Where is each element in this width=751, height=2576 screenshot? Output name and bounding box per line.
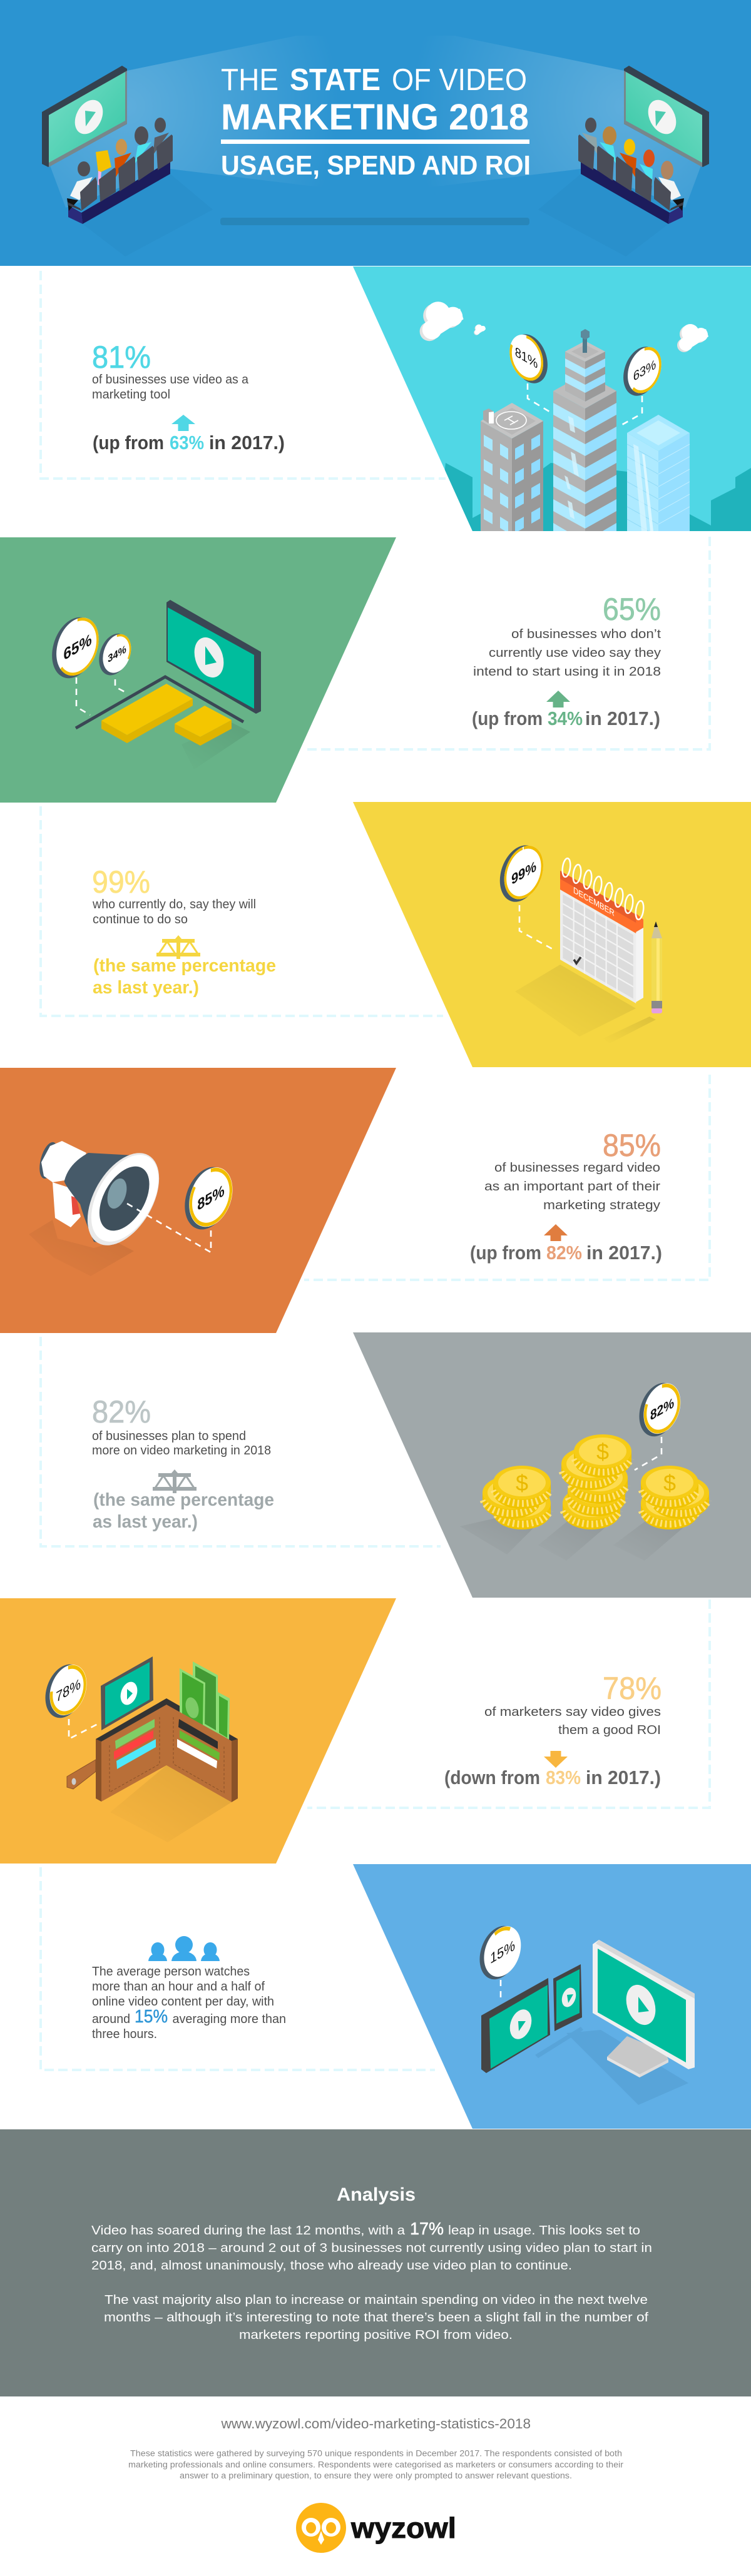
text block: 99%: continue to do so xyxy=(93,913,188,926)
icon: yellow bricks xyxy=(101,684,232,746)
icon: calendar: DECEMBER xyxy=(573,885,615,918)
building: helipad tower xyxy=(481,403,543,533)
heading: analysis: Analysis xyxy=(337,2184,416,2205)
connector: 81% badge xyxy=(528,383,549,412)
badge: 63%: 63% xyxy=(633,357,656,385)
icon: people xyxy=(148,1936,220,1961)
text block: watching stat: more than an hour and a half of xyxy=(92,1980,265,1994)
text block: down from 83%: (down from xyxy=(444,1767,540,1788)
connector: 78% badge xyxy=(69,1719,99,1739)
text block: 78%: 78% xyxy=(603,1671,662,1706)
text block: 82%: 82% xyxy=(92,1394,151,1429)
text block: same percentage xyxy=(93,956,276,998)
text block: up from 82%: in 2017.) xyxy=(586,1242,662,1264)
icon: monitor xyxy=(166,600,261,714)
title: THE xyxy=(221,63,278,97)
bills xyxy=(180,1661,230,1742)
text block: 65% xyxy=(473,592,661,679)
logo: wyzowl: wyzowl xyxy=(350,2512,456,2544)
text block: watching stat: 15% xyxy=(135,2007,168,2027)
icon: clouds xyxy=(420,302,708,352)
illustration: blue panel with devices xyxy=(353,1864,751,2129)
icon: phone xyxy=(553,1964,582,2031)
arrow: down xyxy=(544,1751,568,1768)
text block: watching stat: online video content per day, with xyxy=(92,1995,274,2009)
text block: 82% xyxy=(92,1394,271,1458)
panel: usage 81% xyxy=(41,266,751,537)
panel: importance 85% xyxy=(0,1068,710,1333)
title xyxy=(221,63,531,181)
text block: analysis paragraph one: carry on into 2018 – around 2 out of 3 businesses not currently using video plan to start in xyxy=(91,2241,652,2255)
text block: 85% xyxy=(484,1128,661,1212)
text block: up from 82%: 82% xyxy=(546,1242,582,1264)
panel: ROI 78% xyxy=(0,1598,710,1864)
badge: 34%: 34% xyxy=(108,642,126,666)
panel: intent 65% xyxy=(0,537,710,803)
text block: 65%: currently use video say they xyxy=(489,646,661,660)
text block: analysis paragraph one: Video has soared during the last 12 months, with a xyxy=(91,2224,406,2238)
text block: 85%: 85% xyxy=(603,1128,661,1163)
title: MARKETING 2018 xyxy=(221,97,529,138)
text block: 85%: of businesses regard video xyxy=(494,1161,660,1175)
text block: 78%: them a good ROI xyxy=(558,1723,661,1737)
panel: daily watching 15% xyxy=(41,1864,751,2129)
connector: 15% badge xyxy=(500,1980,501,2000)
footer: methodology note: These statistics were gathered by surveying 570 unique respondents in December 2017. The respondents consisted of both xyxy=(130,2448,622,2458)
badge: 78%: 78% xyxy=(56,1675,81,1706)
connector: 85% badge xyxy=(127,1204,211,1252)
footer: methodology note xyxy=(128,2448,624,2480)
text block: 99% xyxy=(92,865,256,926)
text block: up from 63% xyxy=(93,432,285,454)
icon: scales xyxy=(156,935,200,959)
illustration: orange panel with megaphone xyxy=(0,1068,396,1333)
panel: continue 99% xyxy=(41,802,751,1067)
text block: up from 63%: in 2017.) xyxy=(209,432,285,454)
connector: 65% badge xyxy=(76,677,90,715)
badge: 65% xyxy=(52,610,99,685)
illustration: left cinema screen and audience xyxy=(42,66,213,256)
text block: up from 34% xyxy=(472,707,660,729)
illustration: yellow panel with calendar xyxy=(353,802,751,1067)
text block: 65%: of businesses who don’t xyxy=(511,627,661,641)
text block: 82%: more on video marketing in 2018 xyxy=(92,1444,271,1458)
connector: 82% badge xyxy=(635,1437,662,1470)
badge: 81% xyxy=(509,328,548,388)
badge: 15% xyxy=(479,1914,525,1989)
icon: tablet xyxy=(481,1978,550,2073)
panel: header xyxy=(0,0,751,266)
text block: up from 34%: 34% xyxy=(548,707,583,729)
text block: up from 82%: (up from xyxy=(470,1242,541,1264)
text block: watching stat: The average person watches xyxy=(92,1965,250,1979)
arrow: up xyxy=(171,415,195,431)
illustration: amber panel with wallet xyxy=(0,1598,396,1864)
text block: 78%: of marketers say video gives xyxy=(484,1705,661,1719)
logo: wyzowl xyxy=(296,2503,456,2553)
text block: same percentage xyxy=(93,1490,274,1532)
badge: 82% xyxy=(639,1376,680,1443)
text block: watching stat: around xyxy=(92,2012,130,2026)
text block: same percentage: as last year.) xyxy=(93,1512,198,1532)
text block: same percentage: (the same percentage xyxy=(93,956,276,976)
icon: coin stack right: $ xyxy=(663,1470,676,1496)
badge: 15%: 15% xyxy=(490,1936,515,1967)
illustration: green panel with monitor xyxy=(0,537,396,803)
text block: analysis paragraph one: 17% xyxy=(410,2219,444,2238)
text block: 81%: 81% xyxy=(92,340,151,375)
panel: spend 82% xyxy=(41,1332,751,1598)
text block: watching stat: averaging more than xyxy=(173,2012,286,2026)
text block: 99%: 99% xyxy=(92,865,150,900)
text block: 82%: of businesses plan to spend xyxy=(92,1429,246,1443)
illustration: right cinema screen and audience xyxy=(538,66,709,256)
badge: 99%: 99% xyxy=(511,857,536,888)
text block: 81%: of businesses use video as a xyxy=(92,373,249,387)
text block: analysis paragraph two xyxy=(104,2293,649,2342)
text block: 99%: who currently do, say they will xyxy=(92,898,256,911)
icon: wallet xyxy=(67,1661,238,1802)
badge: 85% xyxy=(185,1159,233,1236)
text block: 78% xyxy=(484,1671,662,1737)
badge: 63% xyxy=(623,340,662,401)
arrow: up xyxy=(544,1224,568,1241)
icon: calendar xyxy=(560,858,645,1003)
icon: coin stack middle: $ xyxy=(596,1439,609,1464)
badge: 78% xyxy=(45,1658,86,1724)
title: OF VIDEO xyxy=(392,63,527,97)
text block: analysis paragraph two: The vast majority also plan to increase or maintain spending on video in the next twelve xyxy=(105,2293,648,2307)
text block: 81%: marketing tool xyxy=(92,388,170,402)
subtitle placeholder bar xyxy=(220,218,529,225)
text block: watching stat xyxy=(92,1965,286,2041)
footer: methodology note: marketing professionals and online consumers. Respondents were categorised as marketers or consumers according to their xyxy=(128,2460,624,2470)
badge: 99% xyxy=(500,838,543,908)
icon: scales xyxy=(153,1469,197,1493)
text block: watching stat: three hours. xyxy=(92,2027,157,2041)
text block: analysis paragraph two: marketers reporting positive ROI from video. xyxy=(239,2328,513,2342)
text block: down from 83%: in 2017.) xyxy=(586,1767,661,1788)
text block: up from 63%: 63% xyxy=(170,432,204,454)
text block: up from 82% xyxy=(470,1242,662,1264)
text block: analysis paragraph one: 2018, and, almost unanimously, those who already use video plan to continue. xyxy=(91,2259,572,2273)
title: STATE xyxy=(290,63,381,97)
connector: 34% badge xyxy=(115,679,128,694)
icon: coin stack left xyxy=(483,1466,551,1529)
text block: up from 34%: (up from xyxy=(472,707,543,729)
footer: methodology note: answer to a preliminary question, to ensure they were only prompted to answer relevant questions. xyxy=(180,2471,572,2480)
badge: 81%: 81% xyxy=(515,344,538,372)
icon: coin stack left: $ xyxy=(516,1470,528,1496)
badge: 82%: 82% xyxy=(650,1394,674,1424)
badge: 34% xyxy=(99,629,131,680)
text block: analysis paragraph two: months – although it’s interesting to note that there’s been a slight fall in the number of xyxy=(104,2311,649,2325)
building: central skyscraper xyxy=(553,329,616,531)
text block: down from 83%: 83% xyxy=(546,1767,581,1788)
text block: same percentage: as last year.) xyxy=(93,978,199,998)
text block: up from 63%: (up from xyxy=(93,432,164,454)
icon: coin stack middle xyxy=(561,1434,631,1529)
icon: pencil xyxy=(651,921,662,1013)
badge: 65%: 65% xyxy=(63,629,92,664)
icon: coin stack right xyxy=(641,1466,709,1529)
connector: 99% badge xyxy=(519,905,556,951)
stand xyxy=(76,677,243,728)
text block: up from 34%: in 2017.) xyxy=(585,707,660,729)
text block: 81% xyxy=(92,340,249,402)
text block: analysis paragraph one xyxy=(91,2219,652,2273)
panel: analysis xyxy=(0,2129,751,2396)
icon: desktop monitor xyxy=(593,1940,695,2077)
badge: 85%: 85% xyxy=(197,1181,225,1215)
illustration: gray panel with coins xyxy=(353,1332,751,1598)
text block: 65%: intend to start using it in 2018 xyxy=(473,665,661,679)
building: glass tower xyxy=(627,415,690,537)
projector light beams xyxy=(50,36,701,208)
icon: megaphone xyxy=(36,1137,159,1261)
text block: 85%: as an important part of their xyxy=(484,1180,660,1194)
text block: 85%: marketing strategy xyxy=(543,1199,660,1212)
footer: source url: www.wyzowl.com/video-marketing-statistics-2018 xyxy=(220,2416,531,2431)
text block: down from 83% xyxy=(444,1767,661,1788)
icon: tablet xyxy=(101,1656,153,1730)
text block: 65%: 65% xyxy=(603,592,661,627)
arrow: up xyxy=(546,691,570,707)
text block: same percentage: (the same percentage xyxy=(93,1490,274,1510)
connector: 63% badge xyxy=(621,396,642,425)
illustration: skyline xyxy=(353,266,751,537)
title: USAGE, SPEND AND ROI xyxy=(221,150,531,181)
text block: analysis paragraph one: leap in usage. This looks set to xyxy=(448,2224,640,2238)
